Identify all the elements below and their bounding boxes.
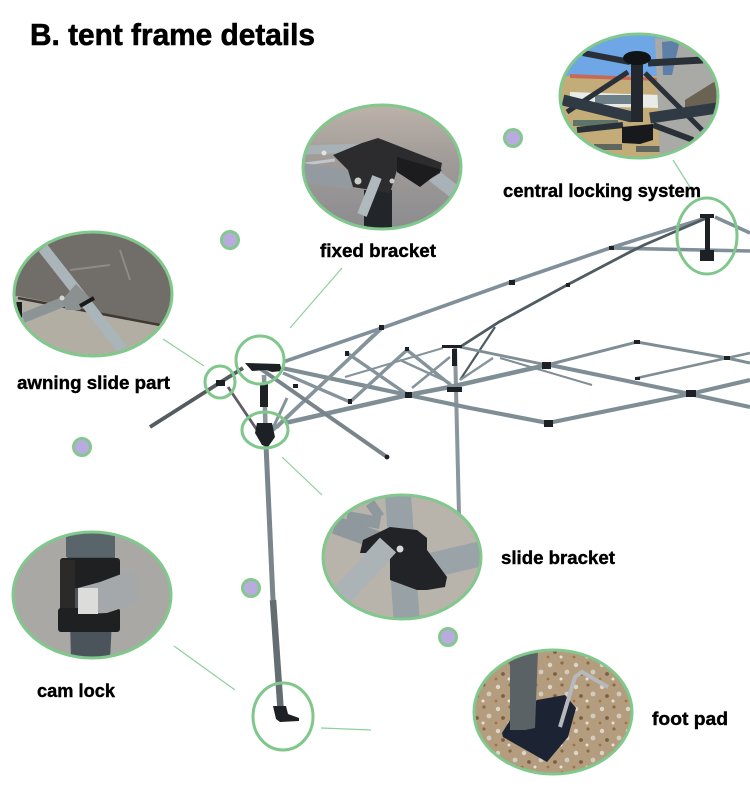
roof beams	[283, 217, 750, 362]
legs	[264, 347, 459, 708]
title: B. tent frame details	[30, 17, 315, 52]
loose awning poles	[150, 367, 387, 457]
label: slide bracket: slide bracket	[501, 548, 615, 568]
photo: fixed bracket	[300, 103, 465, 232]
photo: awning slide part	[12, 230, 174, 358]
label: awning slide part: awning slide part	[17, 373, 170, 393]
photo: foot pad	[470, 648, 638, 778]
highlight circles on frame	[205, 198, 737, 750]
label: foot pad: foot pad	[652, 709, 728, 729]
lower truss beams	[282, 342, 750, 423]
label: fixed bracket: fixed bracket	[320, 241, 436, 261]
photo: cam lock	[10, 530, 175, 660]
photo: slide bracket	[320, 492, 485, 625]
scissor struts	[272, 328, 493, 430]
label: cam lock: cam lock	[37, 681, 116, 701]
tent frame illustration	[150, 217, 750, 708]
frame brackets	[216, 214, 730, 722]
decorative dots	[74, 130, 522, 646]
leader lines	[163, 160, 695, 730]
photo: central locking system	[558, 32, 720, 160]
label: central locking system: central locking system	[503, 181, 701, 201]
